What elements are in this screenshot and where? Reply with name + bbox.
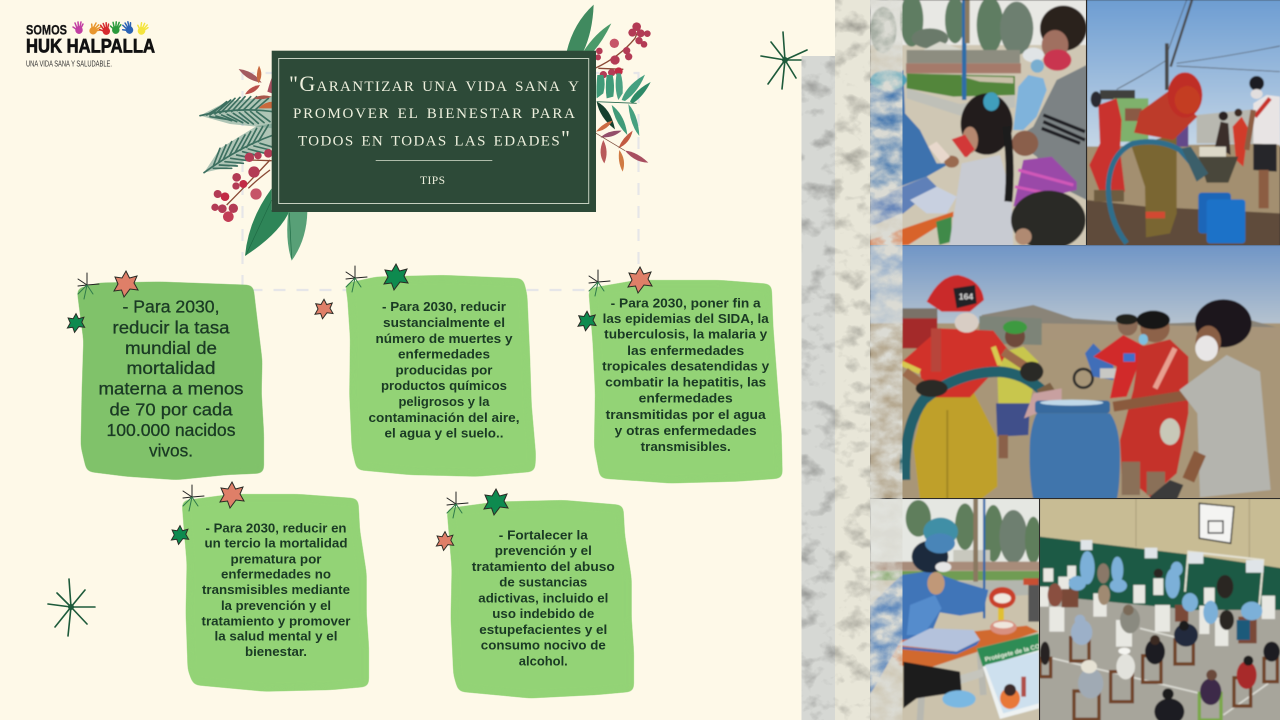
tip text: tratamiento y promover <box>202 613 350 628</box>
water wheelbarrow <box>1198 157 1238 183</box>
medic gown <box>870 571 988 695</box>
tip text: reducir la tasa <box>112 317 230 337</box>
tip text: transmisibles. <box>641 439 731 454</box>
poster <box>977 633 1039 719</box>
right man <box>1253 95 1280 145</box>
icon: coloured hand prints <box>73 21 149 36</box>
big sparkle top <box>761 32 808 89</box>
tip text: prematura por <box>230 551 322 566</box>
papers <box>897 628 980 652</box>
tip text: - Para 2030, reducir <box>382 299 506 314</box>
hose <box>905 372 1042 480</box>
subtitle tips: TIPS <box>420 175 445 187</box>
panel: chemicals and pollution tip <box>315 264 536 477</box>
tip text <box>368 299 520 440</box>
right fern leaves <box>596 73 651 136</box>
left big green leaves <box>245 188 290 256</box>
tip text: el agua y el suelo.. <box>384 425 504 440</box>
right berries <box>595 22 651 78</box>
tip text: bienestar. <box>245 644 307 659</box>
white chairs <box>1039 566 1275 647</box>
tip text: contaminación del aire, <box>368 410 520 425</box>
panel background <box>272 51 596 212</box>
tip text <box>602 295 770 454</box>
tip text: - Para 2030, reducir en <box>206 520 347 535</box>
green blob <box>588 280 783 483</box>
icon: sparkle <box>78 273 99 299</box>
jerry cans <box>1198 193 1231 233</box>
tip text: mortalidad <box>126 358 216 378</box>
icon: green star <box>171 526 189 544</box>
icon: green star <box>484 489 508 515</box>
icon: sparkle <box>346 266 367 292</box>
icon: salmon star <box>220 482 244 508</box>
photo: firefighters and blue water barrel: 164 <box>959 291 973 301</box>
title text: "Garantizar una vida sana y <box>289 71 579 96</box>
tip text: producidas por <box>396 363 492 378</box>
tip text: consumo nocivo de <box>481 638 606 653</box>
tip text: las epidemias del SIDA, la <box>603 311 769 326</box>
tip text: - Para 2030, poner fin a <box>611 295 762 310</box>
main firefighter <box>1132 133 1177 237</box>
main firefighter <box>913 392 997 500</box>
photo: medic teaching dental care: Protégete de la COVID <box>984 640 1051 664</box>
black backing behind photos <box>870 0 1280 720</box>
panel: substance abuse tip <box>436 489 634 698</box>
hose <box>1108 142 1203 243</box>
tip text: combatir la hepatitis, las <box>605 374 766 389</box>
icon: green star <box>384 264 408 290</box>
seated people <box>1040 605 1280 720</box>
inner border <box>279 58 589 204</box>
logo word: somos: SOMOS <box>26 22 67 38</box>
tip text <box>472 527 615 669</box>
photo: medic teaching dental care <box>870 498 1051 720</box>
medic behind <box>1013 75 1047 130</box>
green cap person <box>997 347 1038 403</box>
motorcycle <box>1074 369 1093 388</box>
table <box>880 626 1038 668</box>
left pine fronds <box>200 96 273 173</box>
tip text: un tercio la mortalidad <box>204 536 348 551</box>
icon: salmon star <box>436 532 454 550</box>
right red-brown leaves <box>596 121 648 172</box>
tip text: alcohol. <box>519 654 568 669</box>
red man right <box>1120 339 1188 497</box>
tip text: de 70 por cada <box>110 399 233 419</box>
title panel <box>272 51 596 212</box>
icon: salmon star <box>315 299 333 319</box>
panel: non-communicable diseases tip <box>171 482 369 692</box>
dashed frame behind content <box>242 73 638 290</box>
tip text: las enfermedades <box>627 343 744 358</box>
tip text <box>98 297 244 461</box>
tip text: - Para 2030, <box>122 297 220 317</box>
photo: child at dental health table <box>870 0 1087 249</box>
woman <box>1027 64 1086 200</box>
medical staff <box>1069 551 1262 624</box>
tip text: número de muertes y <box>376 331 513 346</box>
tip text: la salud mental y el <box>214 629 338 644</box>
tip text: la prevención y el <box>221 598 331 613</box>
tip text: vivos. <box>149 441 193 461</box>
tip text: prevención y el <box>495 543 592 558</box>
green blob <box>182 494 369 692</box>
icon: salmon star <box>628 267 652 293</box>
left red-brown leaves <box>239 66 273 108</box>
green blob <box>77 282 264 480</box>
green blob <box>345 275 536 477</box>
teeth model <box>998 607 1004 622</box>
icon: sparkle <box>183 485 204 511</box>
tip text: enfermedades <box>398 347 490 362</box>
left medic <box>870 70 950 200</box>
dark back-row people <box>1048 563 1234 630</box>
tip text: sustancialmente el <box>383 315 505 330</box>
tip text: mundial de <box>125 338 217 358</box>
tip text: estupefacientes y el <box>479 622 607 637</box>
icon: green star <box>67 314 85 332</box>
tip text: peligrosos y la <box>398 394 490 409</box>
tip text: 100.000 nacidos <box>106 420 236 440</box>
tip text: de sustancias <box>499 575 587 590</box>
tip text: materna a menos <box>98 379 244 399</box>
tip text: tuberculosis, la malaria y <box>604 327 768 342</box>
tip text: uso indebido de <box>492 606 594 621</box>
tables <box>1062 589 1257 643</box>
tip text: - Fortalecer la <box>499 527 589 542</box>
girl <box>949 155 1013 247</box>
big sparkle bottom <box>48 579 95 636</box>
divider <box>376 160 492 161</box>
botanical decoration around title <box>200 5 651 261</box>
logo tagline: UNA VIDA SANA Y SALUDABLE. <box>26 60 112 69</box>
right top green leaves <box>567 5 594 52</box>
tip text: productos químicos <box>381 378 507 393</box>
table <box>870 177 937 227</box>
paper overlay on photo left edge <box>870 0 902 720</box>
photo: firefighters filling water containers <box>1087 0 1280 247</box>
tip text: transmitidas por el agua <box>606 407 767 422</box>
tip text: tropicales desatendidas y <box>602 359 770 374</box>
tip text: adictivas, incluido el <box>478 590 608 605</box>
tip text: enfermedades <box>639 391 733 406</box>
green blob <box>447 500 634 698</box>
logo: Somos Huk Halpalla <box>26 21 155 69</box>
medic pants <box>903 662 962 708</box>
icon: green star <box>578 311 596 331</box>
red firefighter left <box>1089 98 1125 197</box>
photo: socially distanced vaccination in court <box>1039 498 1280 720</box>
red man mid <box>1093 335 1145 398</box>
man in grey <box>1113 395 1188 407</box>
background people <box>1215 122 1231 155</box>
title text: todos en todas las edades" <box>298 126 570 151</box>
wooden chairs <box>1040 638 1277 720</box>
panel: maternal mortality tip <box>67 271 264 480</box>
tip text <box>202 520 350 659</box>
photo: firefighters and blue water barrel <box>870 245 1280 500</box>
tip text: enfermedades no <box>221 567 331 582</box>
title text: promover el bienestar para <box>293 98 575 123</box>
icon: sparkle <box>447 492 468 518</box>
torn paper strip <box>802 0 870 720</box>
title text <box>289 71 579 151</box>
logo word: huk halpalla: HUK HALPALLA <box>26 36 155 58</box>
icon: salmon star <box>114 271 138 297</box>
tip text: y otras enfermedades <box>615 423 757 438</box>
child head <box>1011 191 1086 249</box>
icon: sparkle <box>589 270 610 296</box>
tip text: tratamiento del abuso <box>472 559 615 574</box>
tip text: transmisibles mediante <box>202 582 350 597</box>
panel: epidemics tip <box>578 267 783 483</box>
barrel <box>1030 413 1120 500</box>
left berries <box>211 149 273 222</box>
